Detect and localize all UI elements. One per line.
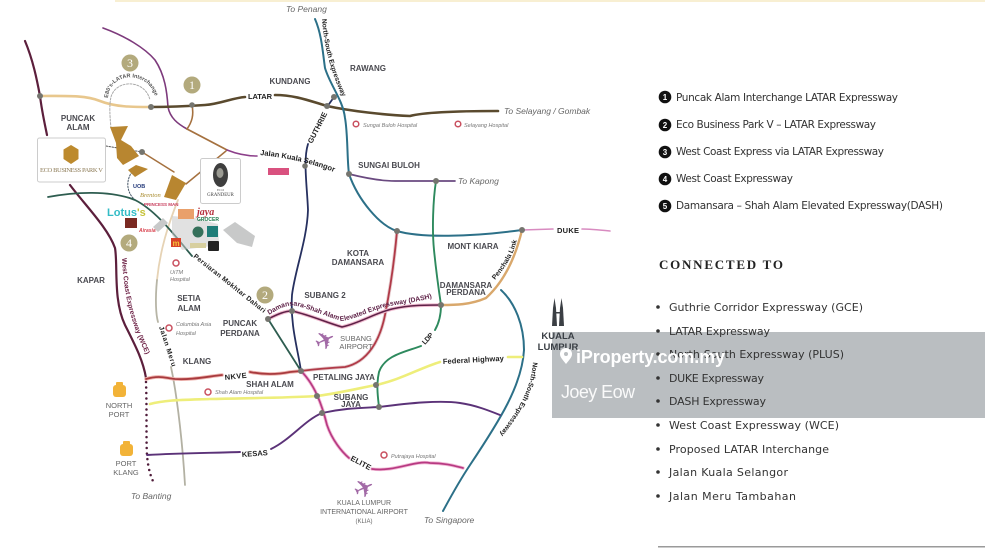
number marker 3: [122, 54, 138, 72]
connected-to list: DUKE Expressway: [669, 372, 764, 385]
road labels: West Coast Expressway (WCE): [122, 258, 150, 354]
retail and amenity logos: Lotus's: [107, 207, 146, 219]
retail and amenity logos: Brenton: [140, 192, 161, 199]
number marker 2: 2: [262, 288, 268, 302]
number marker 1: [184, 76, 200, 94]
road: North-South Expressway: [315, 19, 524, 511]
road: ELITE: [301, 371, 463, 469]
place labels: PERDANA: [446, 288, 486, 297]
place labels: PUNCAK: [223, 319, 257, 328]
road labels: NKVE: [224, 371, 247, 382]
retail and amenity logos: m: [172, 239, 180, 248]
road labels: KESAS: [242, 448, 268, 459]
Kuala Lumpur label: [538, 331, 578, 353]
number marker 4: [120, 234, 138, 252]
place labels: KLANG: [113, 468, 139, 477]
direction labels: To Banting: [131, 491, 172, 501]
road labels: Damansara-Shah Alam Elevated Expressway (DASH): [267, 293, 432, 322]
heading: connected to: CONNECTED TO: [659, 257, 783, 272]
legend item 2: Eco Business Park V – LATAR Expressway: [676, 119, 876, 131]
place labels: RAWANG: [350, 64, 386, 73]
number marker 4: 4: [126, 236, 132, 250]
road: West Coast Expressway: [25, 41, 154, 483]
road labels: Persiaran Mokhtar Dahari: [192, 253, 267, 315]
road: Jalan Kuala Selangor: [103, 28, 257, 184]
road labels: Penchala Link: [492, 240, 517, 280]
hospital markers: UiTM: [170, 270, 184, 276]
icon: Port Klang ship: [120, 441, 133, 456]
number marker 2: [256, 286, 274, 304]
hospital markers: Sungai Buloh Hospital: [363, 123, 418, 129]
place labels: SUBANG: [340, 334, 372, 343]
Kuala Lumpur label: KUALA: [541, 331, 575, 342]
connected-to list: LATAR Expressway: [669, 325, 770, 338]
place labels: JAYA: [341, 400, 361, 409]
direction labels: To Selayang / Gombak: [504, 106, 591, 116]
retail and amenity logos: jaya: [195, 207, 214, 218]
road: Guthrie Corridor: [292, 97, 334, 371]
legend item 3: West Coast Express via LATAR Expressway: [676, 146, 884, 158]
place labels: SETIA: [177, 294, 201, 303]
connected-to list: Jalan Kuala Selangor: [668, 466, 788, 479]
Eco Business Park V card: ECO BUSINESS PARK V: [40, 167, 103, 174]
grey development patches: [153, 216, 255, 250]
place labels: AIRPORT: [339, 342, 373, 351]
road: LDP: [377, 181, 441, 407]
bottom rule: [658, 546, 985, 548]
connected-to list: Guthrie Corridor Expressway (GCE): [669, 301, 863, 314]
road labels: ELITE: [349, 454, 373, 472]
numbered legend: [659, 91, 943, 212]
road: NKVE: [146, 371, 301, 379]
road labels: [104, 19, 579, 472]
place labels: PETALING JAYA: [313, 373, 375, 382]
legend item 5: Damansara – Shah Alam Elevated Expressway(DASH): [676, 200, 943, 212]
legend item 1: 1: [663, 93, 668, 102]
Eco Grandeur card: [200, 158, 240, 204]
hospital markers: Hospital: [170, 277, 191, 283]
road: proposed interchange: [106, 84, 150, 200]
Eco Grandeur card: ECO: [217, 188, 224, 192]
map: [24, 4, 611, 525]
number marker 3: 3: [127, 56, 133, 70]
road: red link: [301, 231, 397, 371]
road labels: Federal Highway: [443, 354, 505, 366]
place labels: NORTH: [106, 401, 132, 410]
road labels: Jalan Meru: [157, 325, 177, 368]
icon: KLIA plane: ✈: [349, 471, 380, 506]
place labels: ALAM: [66, 123, 90, 132]
place labels: KUNDANG: [270, 77, 310, 86]
retail and amenity logos: [107, 168, 289, 251]
place labels: PUNCAK: [61, 114, 95, 123]
watermark banner background: [552, 332, 985, 418]
road: KESAS: [147, 402, 500, 455]
place labels: KUALA LUMPUR: [337, 500, 391, 507]
place labels: SHAH ALAM: [246, 380, 294, 389]
connected-to list: Proposed LATAR Interchange: [669, 443, 829, 456]
road: Penchala Link: [441, 230, 522, 305]
Eco Business Park V card: [38, 138, 106, 182]
hospital markers: Selayang Hospital: [464, 123, 509, 129]
place labels: MONT KIARA: [447, 242, 499, 251]
node markers: [37, 93, 525, 416]
road: Persiaran Mokhtar Dahari: [48, 193, 301, 371]
hospital markers: Shah Alam Hospital: [215, 390, 264, 396]
legend item 4: 4: [663, 175, 668, 184]
gold development parcels: [110, 126, 186, 200]
retail and amenity logos: UOB: [133, 184, 145, 190]
retail and amenity logos: Airasia: [138, 228, 156, 234]
road labels: E80's-LATAR Interchange: [104, 74, 158, 98]
direction labels: To Singapore: [424, 515, 475, 525]
place labels: PORT: [109, 410, 130, 419]
road: Jalan Meru: [156, 200, 185, 485]
place labels: SUBANG: [334, 393, 368, 402]
place labels: (KLIA): [355, 519, 373, 525]
road labels: North-South Expressway: [500, 362, 538, 436]
place labels: INTERNATIONAL AIRPORT: [320, 509, 409, 516]
retail and amenity logos: GROCER: [197, 217, 219, 223]
connected-to list: [656, 301, 863, 503]
road labels: Jalan Kuala Selangor: [260, 150, 336, 172]
Kuala Lumpur label: LUMPUR: [538, 342, 578, 353]
direction labels: To Kapong: [458, 176, 499, 186]
connected-to list: West Coast Expressway (WCE): [669, 419, 839, 432]
hospital markers: Hospital: [176, 331, 197, 337]
watermark: agent name: Joey Eow: [561, 382, 636, 402]
legend item 1: Puncak Alam Interchange LATAR Expressway: [676, 92, 898, 104]
connected-to list: North-South Expressway (PLUS): [669, 348, 844, 361]
retail and amenity logos: PRINCESS MAN: [144, 202, 179, 207]
place labels: PERDANA: [220, 329, 260, 338]
road: DUKE: [522, 229, 610, 231]
hospital markers: [166, 121, 509, 460]
road labels: GUTHRIE: [306, 111, 329, 145]
road: DASH: [268, 305, 441, 327]
connected-to list: Jalan Meru Tambahan: [668, 490, 796, 503]
place labels: KOTA: [347, 249, 369, 258]
road: Federal Highway: [150, 357, 522, 404]
place labels: PORT: [116, 459, 137, 468]
place labels: SUBANG 2: [304, 291, 346, 300]
road: LATAR Expressway: [40, 95, 498, 116]
direction labels: To Penang: [286, 4, 327, 14]
place labels: DAMANSARA: [440, 281, 492, 290]
place labels: KAPAR: [77, 276, 105, 285]
legend item 3: 3: [663, 148, 668, 157]
road labels: LDP: [421, 332, 435, 346]
Eco Grandeur card: GRANDEUR: [207, 193, 235, 198]
number marker 1: 1: [189, 78, 195, 92]
legend item 4: West Coast Expressway: [676, 173, 793, 185]
icon: Petronas twin towers: [552, 298, 564, 326]
place labels: SUNGAI BULOH: [358, 161, 420, 170]
road labels: LATAR: [248, 92, 273, 101]
place labels: ALAM: [177, 304, 201, 313]
legend item 2: 2: [663, 121, 668, 130]
connected-to list: DASH Expressway: [669, 395, 766, 408]
road labels: North-South Expressway: [322, 19, 346, 96]
hospital markers: Columbia Asia: [176, 322, 211, 328]
place labels: DAMANSARA: [332, 258, 384, 267]
icon: Subang airport plane: ✈: [310, 323, 341, 358]
watermark: iProperty logo: iProperty.com.my: [576, 347, 725, 367]
legend item 5: 5: [663, 202, 668, 211]
hospital markers: Putrajaya Hospital: [391, 454, 436, 460]
direction labels: [131, 4, 591, 525]
road labels: DUKE: [557, 226, 579, 235]
top strip: [115, 0, 985, 2]
place labels: KLANG: [183, 357, 211, 366]
place labels: [61, 64, 499, 525]
road: to Kepong: [349, 174, 455, 181]
icon: North Port ship: [113, 382, 126, 397]
